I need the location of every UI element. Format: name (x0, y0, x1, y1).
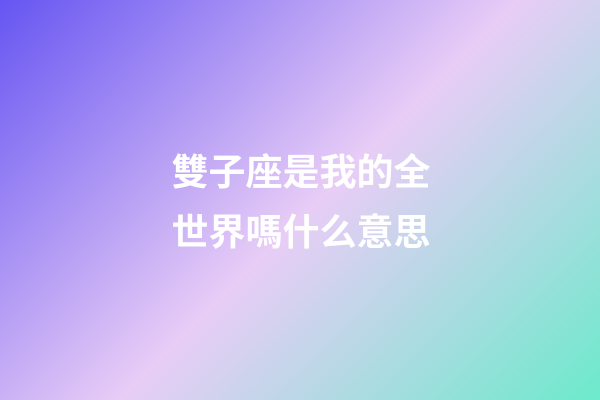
title: 雙子座是我的全 (172, 152, 430, 193)
title (172, 152, 430, 253)
title: 世界嗎什么意思 (172, 212, 430, 253)
